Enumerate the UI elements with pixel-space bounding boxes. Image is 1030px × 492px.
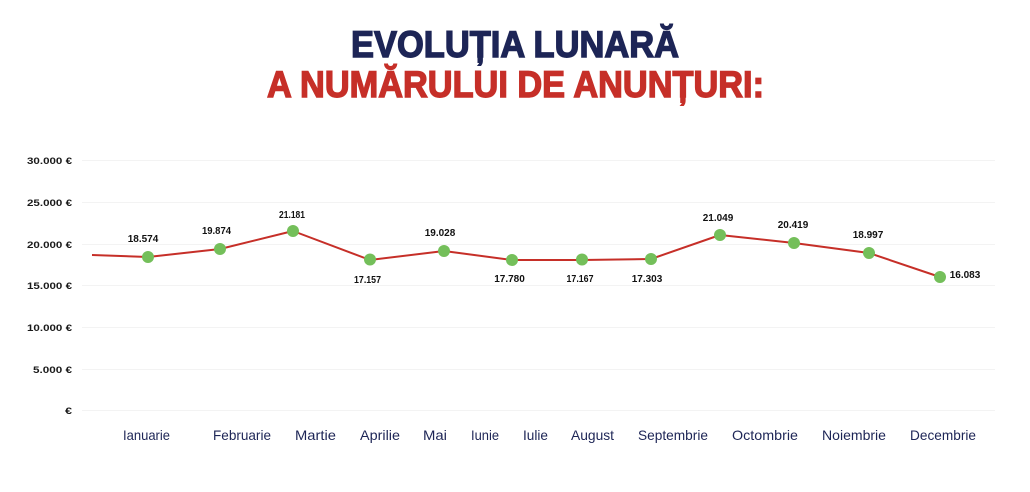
y axis labels: 5.000 €: [33, 365, 73, 376]
data value labels: 17.303: [632, 274, 663, 285]
data value labels: 20.419: [778, 220, 809, 231]
month labels: Februarie: [213, 427, 271, 443]
data value labels: 19.874: [202, 226, 231, 237]
title line 1: EVOLUȚIA LUNARĂ: [351, 24, 679, 66]
month labels: Aprilie: [360, 427, 400, 443]
data points: [142, 225, 946, 283]
data line: [92, 231, 940, 277]
data value labels: [128, 210, 981, 286]
month labels: Septembrie: [638, 427, 708, 443]
title line 2: A NUMĂRULUI DE ANUNȚURI:: [267, 64, 764, 106]
month labels: Mai: [423, 427, 447, 443]
month labels: Iulie: [523, 427, 548, 443]
month labels: Iunie: [471, 427, 499, 443]
month labels: [123, 427, 976, 443]
data value labels: 21.181: [279, 210, 305, 221]
y axis labels: 25.000 €: [27, 198, 73, 209]
y axis labels: [27, 156, 73, 417]
data value labels: 18.997: [853, 230, 884, 241]
month labels: August: [571, 427, 614, 443]
data value labels: 18.574: [128, 234, 159, 245]
month labels: Ianuarie: [123, 427, 170, 443]
y axis labels: €: [65, 406, 73, 417]
data value labels: 16.083: [950, 270, 981, 281]
line chart: [27, 156, 995, 443]
data value labels: 17.780: [494, 274, 525, 285]
data value labels: 17.167: [566, 274, 594, 285]
data value labels: 21.049: [703, 213, 734, 224]
data value labels: 19.028: [425, 228, 456, 239]
month labels: Martie: [295, 427, 336, 443]
month labels: Octombrie: [732, 427, 798, 443]
y axis labels: 15.000 €: [27, 281, 73, 292]
y axis labels: 30.000 €: [27, 156, 73, 167]
data value labels: 17.157: [354, 275, 381, 286]
title: [267, 24, 764, 106]
y axis labels: 20.000 €: [27, 240, 73, 251]
month labels: Noiembrie: [822, 427, 886, 443]
y axis labels: 10.000 €: [27, 323, 73, 334]
month labels: Decembrie: [910, 427, 976, 443]
